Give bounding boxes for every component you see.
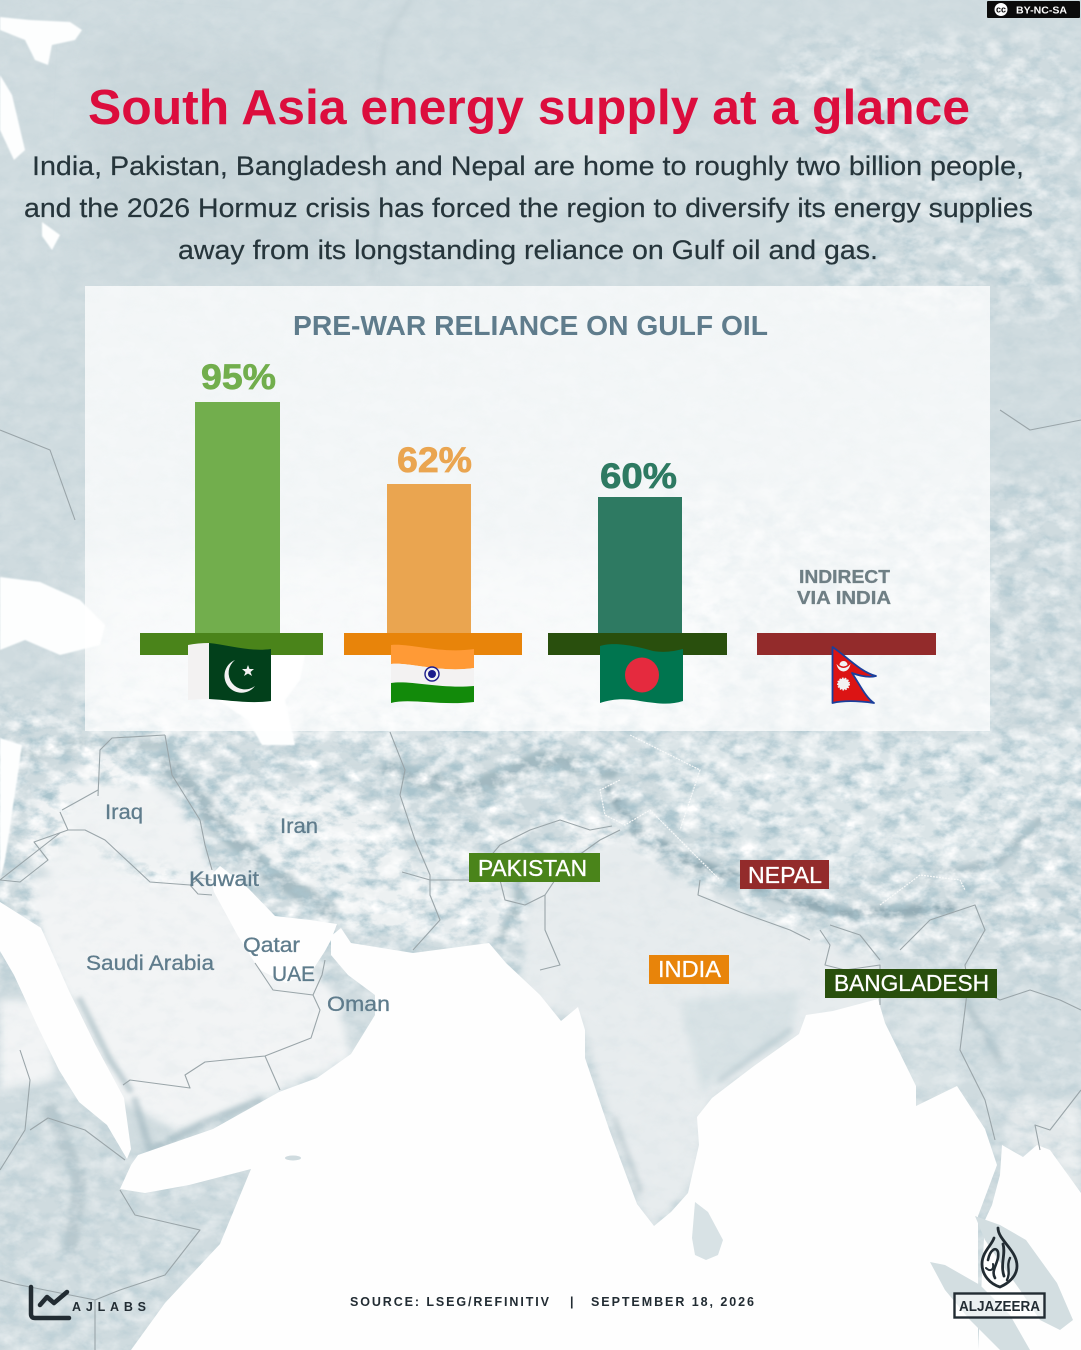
sea: Gulf of Thailand <box>978 1145 1081 1350</box>
map labels: Gulf countries: Oman <box>327 993 390 1016</box>
logo: AJLabs: AJLABS <box>72 1300 146 1314</box>
bar: Bangladesh 60%: 60% <box>600 457 677 496</box>
bar: India 62%: 62% <box>397 441 472 480</box>
label: India: INDIA <box>658 956 721 982</box>
map labels: Gulf countries: Iran <box>280 815 318 838</box>
map labels: Gulf countries: Kuwait <box>189 868 259 891</box>
sea: Red Sea <box>0 902 131 1159</box>
licence badge: BY-NC-SA <box>1016 4 1067 16</box>
sea: Indian Ocean <box>120 928 997 1350</box>
licence badge <box>987 1 1080 18</box>
intro text <box>24 151 1033 265</box>
icon: flag of Bangladesh <box>600 644 683 704</box>
sea: northern coasts and Black Sea <box>0 17 305 880</box>
country borders <box>0 410 1081 1350</box>
land: Socotra <box>285 1156 301 1160</box>
bar: Nepal indirect: VIA INDIA <box>797 588 891 608</box>
land: Sri Lanka <box>692 1202 723 1260</box>
intro text: and the 2026 Hormuz crisis has forced the region to diversify its energy supplies <box>24 193 1033 223</box>
map labels: Gulf countries: Saudi Arabia <box>86 952 214 975</box>
bar: India 62% <box>344 441 522 655</box>
icon: flag of India <box>391 645 474 703</box>
bar: Pakistan 95% <box>140 358 323 655</box>
bar: Pakistan 95%: 95% <box>201 358 276 397</box>
logo: Al Jazeera <box>954 1228 1044 1318</box>
map labels: Gulf countries: Iraq <box>105 801 143 824</box>
map labels: Gulf countries <box>86 801 390 1016</box>
map labels: Gulf countries: Qatar <box>243 934 300 957</box>
chart heading: PRE-WAR RELIANCE ON GULF OIL <box>293 310 768 341</box>
intro text: away from its longstanding reliance on Gulf oil and gas. <box>178 235 878 265</box>
bar: Nepal indirect <box>757 567 936 655</box>
land: Malay Peninsula and Sumatra <box>930 1216 1073 1350</box>
licence badge: cc <box>996 4 1006 14</box>
sea: Persian Gulf <box>210 866 337 983</box>
icon: flag of Nepal <box>832 647 876 703</box>
logo: Al Jazeera: ALJAZEERA <box>959 1298 1040 1315</box>
source line: SEPTEMBER 18, 2026 <box>591 1295 754 1309</box>
source line <box>350 1295 754 1309</box>
title: South Asia energy supply at a glance <box>88 81 970 135</box>
map labels: Gulf countries: UAE <box>272 963 315 986</box>
label: Nepal: NEPAL <box>748 862 822 888</box>
icon: flag of Pakistan <box>188 643 271 702</box>
logo: AJLabs <box>31 1287 146 1318</box>
label: Bangladesh: BANGLADESH <box>834 970 989 996</box>
intro text: India, Pakistan, Bangladesh and Nepal are home to roughly two billion people, <box>32 151 1024 181</box>
bar: Bangladesh 60% <box>548 457 727 655</box>
source line: SOURCE: LSEG/REFINITIV <box>350 1295 550 1309</box>
label: Pakistan: PAKISTAN <box>478 855 587 881</box>
bar: Nepal indirect: INDIRECT <box>799 567 890 587</box>
source line: | <box>570 1295 574 1309</box>
panel: pre-war reliance on Gulf oil <box>85 286 990 731</box>
